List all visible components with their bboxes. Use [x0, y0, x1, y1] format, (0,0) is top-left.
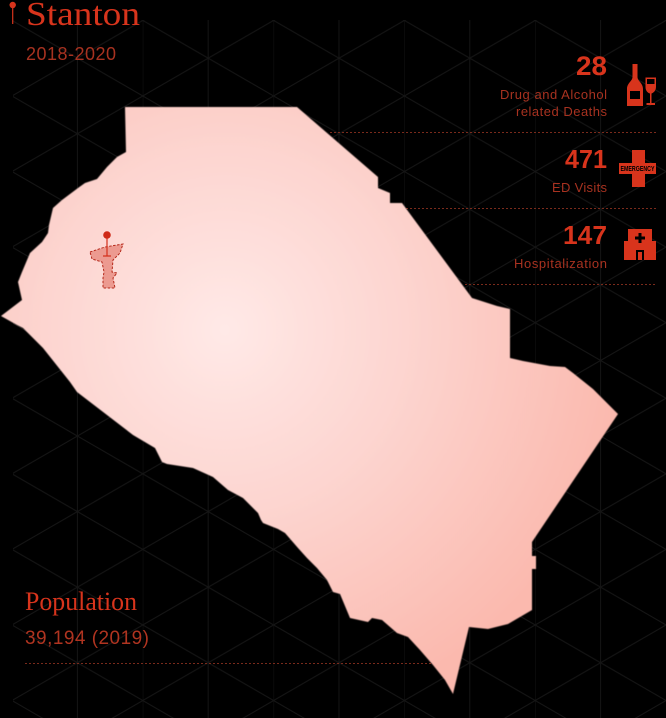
map pin [103, 231, 111, 256]
stat: hospitalization [514, 220, 607, 271]
icon: hospital [624, 229, 656, 260]
population value: 39,194 (2019) [25, 628, 149, 649]
dotted divider lines [25, 132, 656, 664]
number 28: 28 [576, 51, 607, 81]
number 147: 147 [563, 220, 607, 250]
label ED visits: ED Visits [552, 180, 608, 195]
stat: ED visits [552, 144, 608, 195]
city marker: Stanton boundary and pin [90, 231, 123, 288]
date range: 2018-2020 [26, 44, 116, 64]
title pin icon [10, 2, 16, 24]
city boundary [90, 244, 123, 288]
county map [1, 107, 618, 694]
population heading: Population [25, 587, 137, 616]
label deaths [500, 87, 608, 119]
label deaths: related Deaths [516, 104, 608, 119]
stat: deaths [500, 51, 608, 119]
icon: emergency cross: EMERGENCY [620, 166, 655, 173]
icon: bottle and wine glass [627, 64, 656, 106]
label deaths: Drug and Alcohol [500, 87, 607, 102]
icon: emergency cross [619, 150, 656, 187]
label hospitalization: Hospitalization [514, 256, 607, 271]
number 471: 471 [565, 144, 607, 174]
